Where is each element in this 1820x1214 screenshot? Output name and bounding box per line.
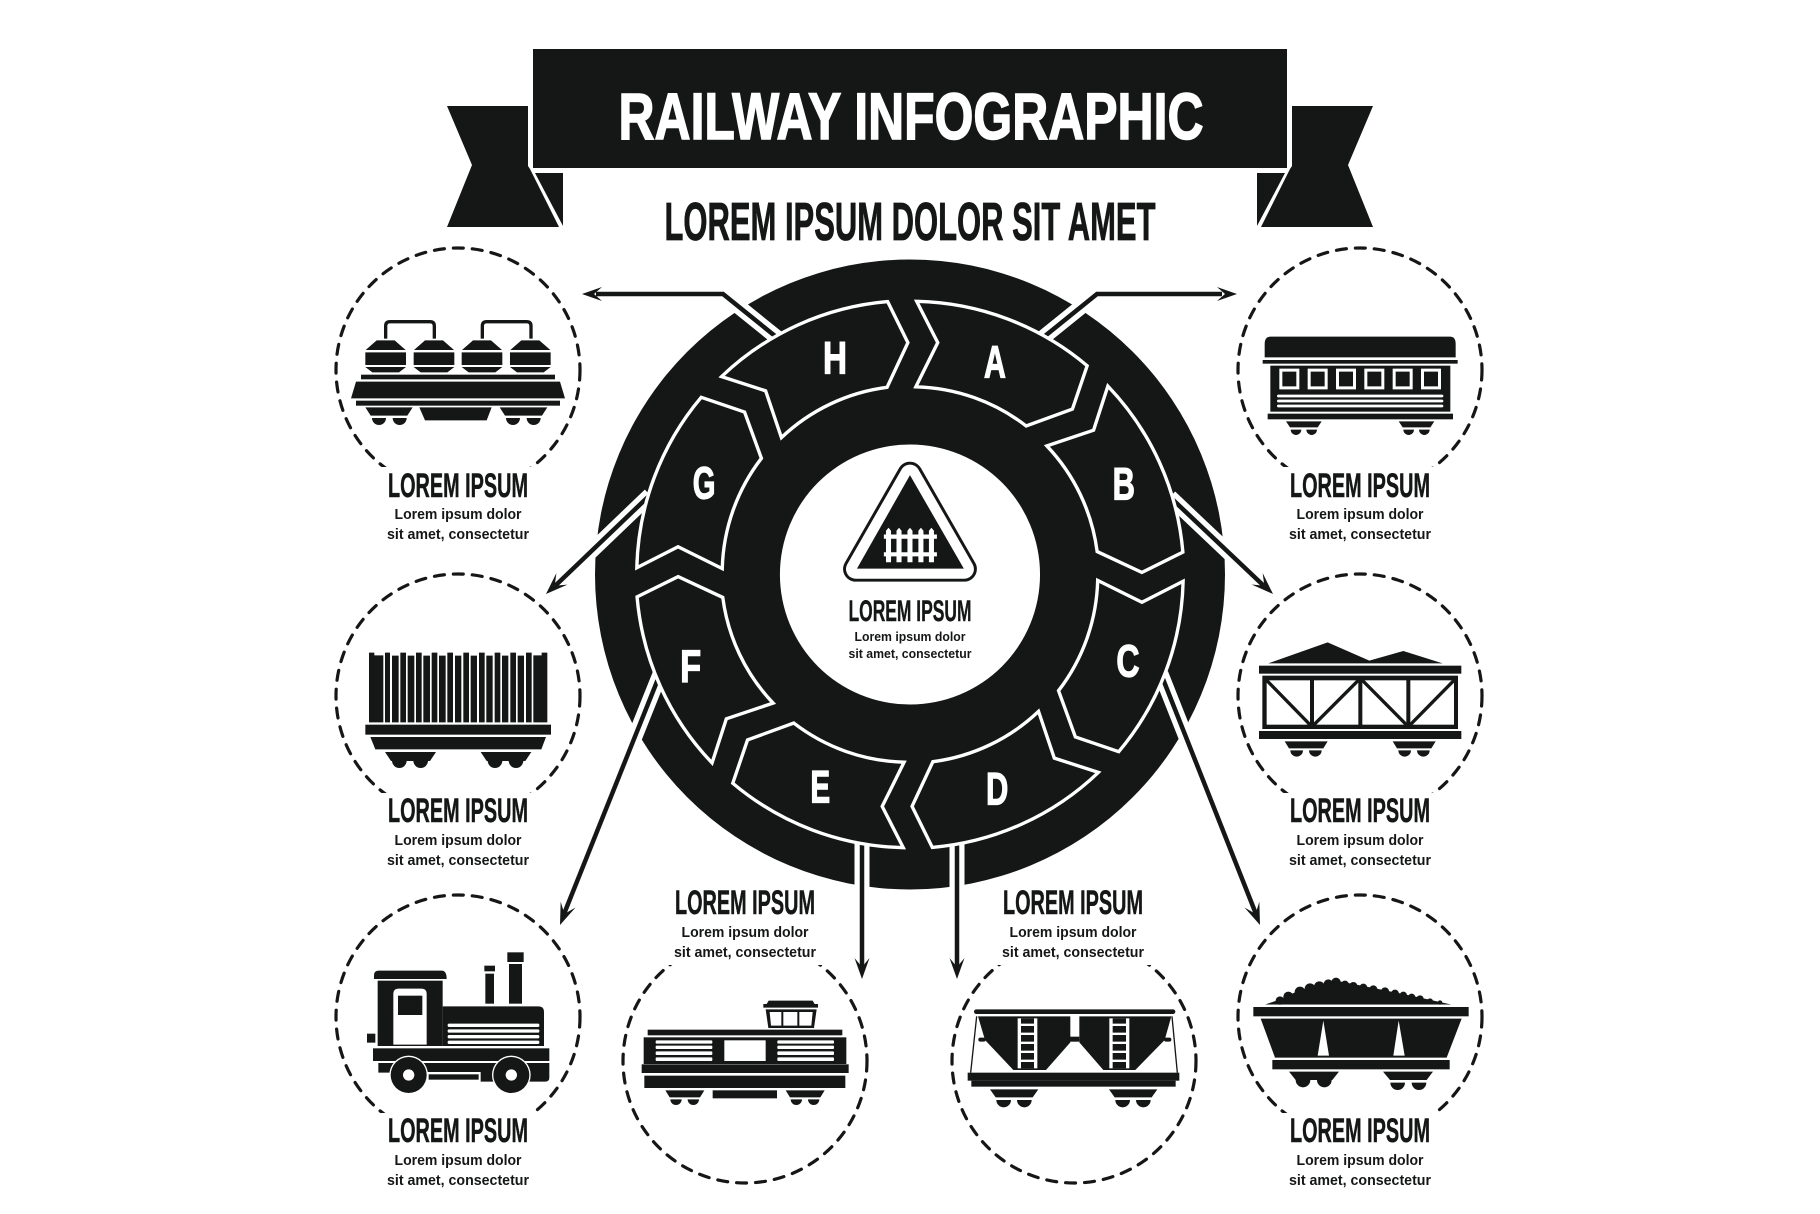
centre caption: sit amet, consectetur (848, 646, 972, 661)
segment A (916, 301, 1087, 426)
label: sit amet, consectetur (1289, 852, 1431, 869)
segment F (592, 554, 801, 763)
arrow H (582, 287, 780, 340)
arrow B (1170, 497, 1279, 600)
label: Lorem ipsum dolor (682, 924, 809, 941)
label (674, 884, 816, 961)
label: LOREM IPSUM (1290, 1112, 1430, 1150)
label: sit amet, consectetur (387, 1172, 529, 1189)
letter A: A (984, 337, 1006, 388)
segment G (637, 397, 761, 569)
label: Lorem ipsum dolor (394, 1152, 522, 1169)
label: sit amet, consectetur (674, 944, 816, 961)
label (387, 467, 529, 543)
ribbon right tail (1261, 106, 1373, 227)
subtitle: LOREM IPSUM DOLOR SIT AMET (664, 192, 1156, 252)
arrow D (950, 838, 964, 979)
panel: top right passenger car (1238, 248, 1482, 543)
label (1289, 467, 1431, 543)
label: LOREM IPSUM (1003, 884, 1143, 922)
centre caption: Lorem ipsum dolor (854, 629, 966, 644)
label: sit amet, consectetur (1289, 1172, 1431, 1189)
segment B (1019, 386, 1228, 595)
letter B: B (1113, 459, 1135, 510)
label: Lorem ipsum dolor (1296, 506, 1424, 523)
letter C: C (1116, 635, 1140, 686)
panel: middle right truss wagon (1238, 574, 1482, 869)
letter E: E (810, 762, 830, 813)
label: Lorem ipsum dolor (1296, 832, 1424, 849)
icon: tank wagon (351, 322, 565, 425)
label: sit amet, consectetur (1289, 526, 1431, 543)
title banner (447, 49, 1373, 227)
label (387, 1112, 529, 1189)
letter F: F (680, 641, 701, 692)
ribbon right fold (1257, 173, 1285, 226)
connector arrows (540, 287, 1279, 979)
label (1289, 1112, 1431, 1189)
arrow C (1161, 674, 1267, 928)
panel: bottom left locomotive (336, 895, 580, 1189)
label: sit amet, consectetur (387, 852, 529, 869)
label: LOREM IPSUM (1290, 467, 1430, 505)
icon: timber wagon (365, 653, 551, 768)
wheel disc (595, 260, 1225, 890)
arrow A (1040, 287, 1237, 340)
label: LOREM IPSUM (675, 884, 815, 922)
centre caption (848, 595, 972, 661)
letter G: G (693, 457, 716, 508)
icon: hopper wagon (968, 1009, 1179, 1107)
arrow F (553, 674, 660, 928)
panel: top left hopper tanks (336, 248, 580, 543)
letter D: D (986, 764, 1008, 815)
centre caption: LOREM IPSUM (848, 595, 972, 628)
segment D (890, 684, 1099, 893)
banner body (533, 49, 1287, 168)
icon: locomotive (367, 952, 549, 1094)
label (1002, 884, 1144, 961)
panel: bottom right coal wagon (1238, 895, 1482, 1189)
label: LOREM IPSUM (388, 467, 528, 505)
label: Lorem ipsum dolor (1296, 1152, 1424, 1169)
arrow G (540, 495, 650, 600)
label: Lorem ipsum dolor (394, 832, 522, 849)
icon: passenger car (1263, 337, 1458, 435)
label: LOREM IPSUM (1290, 792, 1430, 830)
icon: caboose wagon (642, 1001, 849, 1105)
label: sit amet, consectetur (387, 526, 529, 543)
label: Lorem ipsum dolor (1010, 924, 1137, 941)
label (1289, 792, 1431, 869)
arrow E (854, 838, 870, 979)
label (387, 792, 529, 869)
segment C (1059, 580, 1183, 752)
label: Lorem ipsum dolor (394, 506, 522, 523)
label: LOREM IPSUM (388, 1112, 528, 1150)
label: sit amet, consectetur (1002, 944, 1144, 961)
panel: middle left timber wagon (336, 574, 580, 869)
title text: RAILWAY INFOGRAPHIC (618, 79, 1204, 153)
icon: truss wagon (1259, 642, 1461, 757)
panel: bottom centre left caboose (623, 884, 867, 1183)
label: LOREM IPSUM (388, 792, 528, 830)
wheel segments and centre (592, 256, 1228, 893)
segment E (733, 723, 904, 848)
centre white circle (780, 444, 1040, 705)
icon: coal wagon (1253, 978, 1469, 1090)
ribbon left fold (535, 173, 563, 226)
ribbon left tail (447, 106, 559, 227)
letter H: H (823, 332, 847, 383)
segment H (721, 256, 930, 465)
icon: level crossing sign (856, 474, 964, 569)
panel: bottom centre right hopper wagon (952, 884, 1196, 1183)
